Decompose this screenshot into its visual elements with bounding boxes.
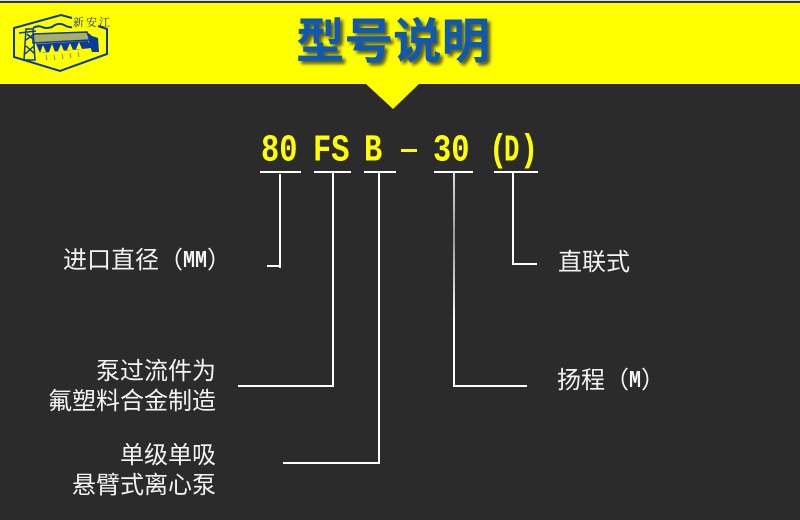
- label: material: [48, 351, 216, 416]
- logo: [13, 14, 112, 72]
- label: inlet diameter: 进口直径（ ）: [63, 240, 231, 275]
- code part 30: 30: [433, 129, 469, 172]
- leader: direct coupled: [494, 171, 538, 265]
- label: head: 扬程（ ）: [557, 360, 665, 395]
- leader: material: [238, 171, 351, 387]
- label: material: 氟塑料合金制造: [48, 381, 216, 416]
- leader: inlet diameter: [260, 171, 301, 268]
- title: 型号说明: [296, 2, 490, 72]
- label: material: 泵过流件为: [96, 351, 216, 386]
- label: inlet diameter: MM: [183, 248, 207, 275]
- model code: [261, 129, 538, 172]
- code part 80: 80: [261, 129, 297, 172]
- code part (D): ): [520, 129, 538, 172]
- code part (D): [489, 129, 538, 172]
- label: single stage cantilever: 悬臂式离心泵: [72, 465, 216, 500]
- code part (D): D: [504, 129, 519, 172]
- label: single stage cantilever: 单级单吸: [120, 435, 216, 470]
- notch arrow: [366, 84, 419, 109]
- code part FS: FS: [313, 129, 349, 172]
- dash: [401, 149, 417, 152]
- header banner: [0, 0, 800, 109]
- code part (D): (: [489, 129, 507, 172]
- leader: single stage: [283, 171, 396, 464]
- label: head: M: [629, 368, 641, 395]
- logo: 新安江: [73, 14, 112, 30]
- label: direct coupled: 直联式: [558, 242, 630, 277]
- code part B: B: [364, 129, 382, 172]
- label: single stage cantilever: [72, 435, 216, 500]
- leader: head: [434, 171, 527, 387]
